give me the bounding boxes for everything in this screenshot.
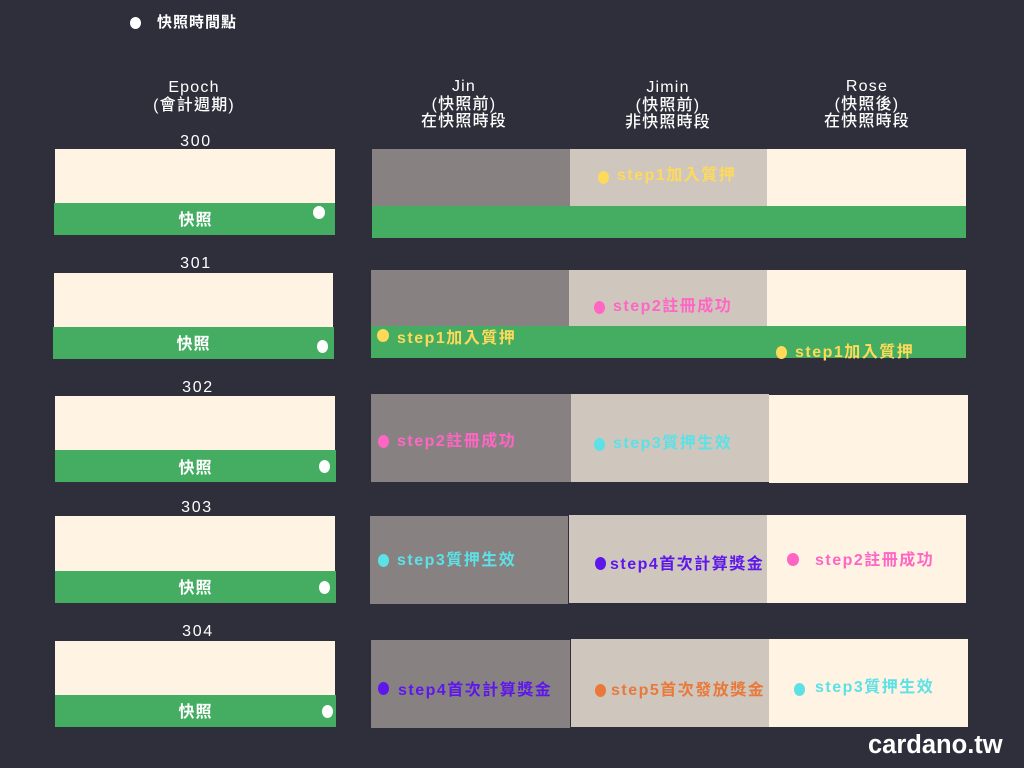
heading: Jin column: [421, 78, 507, 130]
row 301: Jin, Jimin, Rose bands: [371, 270, 966, 358]
row 302: Jin, Jimin, Rose bands: [371, 394, 968, 483]
epoch 300 bar: [54, 149, 335, 235]
heading: Rose column: Rose: [846, 78, 888, 95]
epoch 302 label: 302: [182, 379, 214, 396]
step 4 marker: Jimin epoch 303: step4首次計算獎金: [610, 556, 764, 573]
heading: Jimin column: Jimin: [646, 79, 690, 96]
epoch 300 label: 300: [180, 133, 212, 150]
epoch 302 bar: [55, 396, 336, 482]
epoch 300 bar: 快照: [178, 212, 212, 229]
brand: cardano.tw: cardano.tw: [868, 731, 1003, 759]
step 5 marker: Jimin epoch 304: step5首次發放獎金: [611, 682, 765, 699]
heading: Rose column: 在快照時段: [824, 113, 910, 130]
heading: Epoch column: Epoch: [168, 79, 220, 96]
epoch 301 bar: [53, 273, 334, 359]
heading: Jimin column: (快照前): [636, 96, 700, 114]
step 3 marker: Rose epoch 304: step3質押生效: [815, 679, 934, 696]
epoch 304 label: 304: [182, 623, 214, 640]
step 3 marker: Jin epoch 303: step3質押生效: [397, 552, 516, 569]
step 1 marker: Rose epoch 301: step1加入質押: [795, 344, 914, 361]
heading: Rose column: (快照後): [835, 96, 899, 112]
epoch 302 bar: 快照: [178, 460, 212, 477]
heading: Jin column: (快照前): [432, 96, 496, 112]
step 1 marker: Jimin epoch 300: step1加入質押: [617, 167, 736, 184]
step 2 marker: Jin epoch 302: step2註冊成功: [397, 433, 516, 450]
step 1 marker: Jin epoch 301: step1加入質押: [397, 330, 516, 347]
epoch 303 bar: [55, 516, 336, 603]
step 3 marker: Jimin epoch 302: step3質押生效: [613, 435, 732, 452]
epoch 304 bar: [55, 641, 336, 727]
row 303: Jin, Jimin, Rose bands: [370, 515, 966, 604]
step 4 marker: Jin epoch 304: step4首次計算獎金: [398, 682, 552, 699]
heading: Jimin column: [625, 79, 711, 131]
heading: Jin column: Jin: [452, 78, 476, 95]
epoch 304 bar: 快照: [178, 704, 212, 721]
heading: Epoch column: (會計週期): [153, 96, 235, 114]
heading: Jin column: 在快照時段: [421, 113, 507, 130]
row 304: Jin, Jimin, Rose bands: [371, 639, 968, 728]
row 300: Jin, Jimin, Rose bands: [372, 149, 966, 238]
epoch 301 bar: 快照: [176, 336, 210, 353]
epoch 303 label: 303: [181, 499, 213, 516]
heading: Jimin column: 非快照時段: [625, 114, 711, 131]
epoch 301 label: 301: [180, 255, 212, 272]
heading: Epoch column: [153, 79, 235, 114]
epoch 303 bar: 快照: [178, 580, 212, 597]
legend: snapshot time point: 快照時間點: [157, 14, 237, 31]
heading: Rose column: [824, 78, 910, 130]
step 2 marker: Jimin epoch 301: step2註冊成功: [613, 298, 732, 315]
step 2 marker: Rose epoch 303: step2註冊成功: [815, 552, 934, 569]
